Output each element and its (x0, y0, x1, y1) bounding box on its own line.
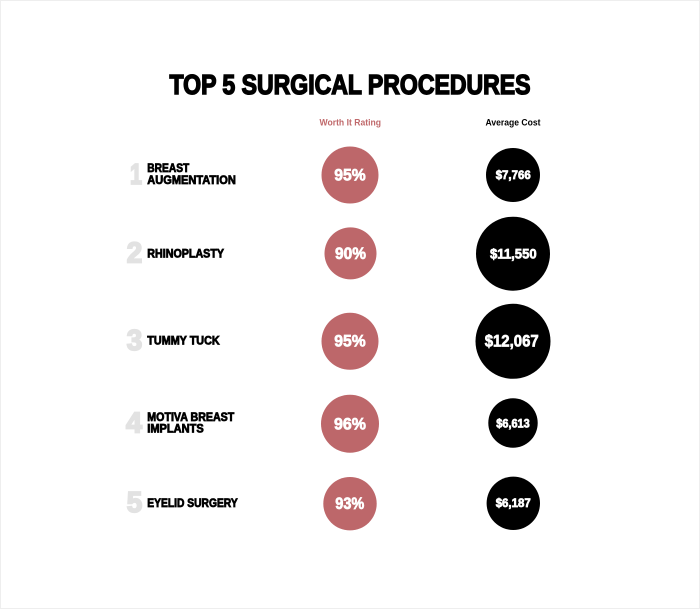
rating bubble (324, 227, 376, 279)
rating bubble: 96% (334, 416, 366, 434)
rating bubble: 93% (335, 495, 365, 513)
cost bubble (487, 477, 540, 530)
rank number 3: 3 (127, 325, 142, 357)
cost bubble: $7,766 (496, 168, 531, 182)
cost bubble (476, 304, 550, 379)
cost bubble: $6,187 (496, 496, 531, 510)
rating bubble: 95% (334, 332, 366, 350)
column heading: worth it rating: Worth It Rating (320, 118, 381, 128)
cost bubble (488, 398, 538, 448)
row 1: breast augmentation (130, 146, 540, 204)
rating bubble (322, 146, 378, 204)
cost bubble: $12,067 (485, 332, 539, 350)
cost bubble (476, 217, 550, 291)
procedure label: IMPLANTS (147, 424, 204, 436)
rank number 5: 5 (127, 487, 142, 519)
cost bubble: $11,550 (490, 245, 537, 261)
procedure label: EYELID SURGERY (147, 498, 238, 510)
column heading: average cost: Average Cost (486, 118, 541, 128)
rating bubble: 95% (334, 166, 366, 184)
cost bubble (486, 148, 540, 202)
row 3: tummy tuck (127, 304, 550, 379)
procedure label: AUGMENTATION (147, 175, 236, 187)
rank number 4: 4 (126, 408, 142, 440)
title: TOP 5 SURGICAL PROCEDURES (170, 69, 530, 100)
rating bubble (323, 477, 377, 530)
row 5: eyelid surgery (127, 477, 540, 530)
rank number 2: 2 (127, 237, 142, 269)
row 2: rhinoplasty (127, 217, 550, 291)
row 4: motiva breast implants (126, 395, 538, 453)
procedure label: RHINOPLASTY (147, 248, 224, 260)
rating bubble: 90% (335, 245, 366, 263)
cost bubble: $6,613 (496, 418, 530, 430)
procedure label: TUMMY TUCK (147, 336, 220, 348)
procedure label: BREAST (147, 163, 189, 175)
procedure label: MOTIVA BREAST (147, 412, 234, 424)
rating bubble (321, 395, 379, 453)
rating bubble (322, 313, 378, 370)
rank number 1: 1 (130, 159, 142, 191)
